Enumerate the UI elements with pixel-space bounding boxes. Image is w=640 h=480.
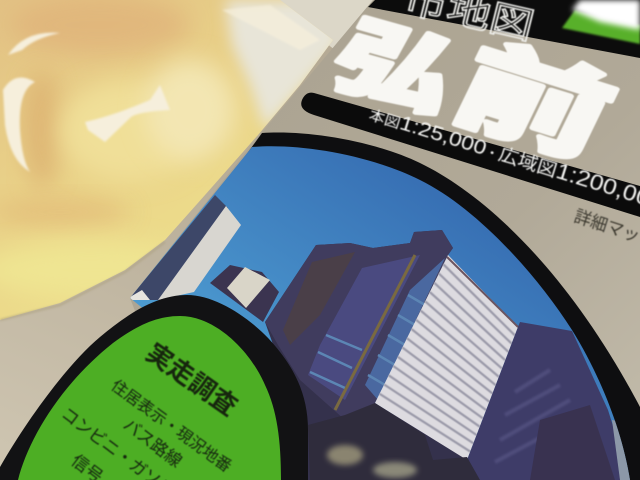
small left building [125, 195, 241, 300]
right building [465, 322, 634, 480]
plastic highlights [3, 5, 320, 172]
black badge ring [0, 295, 308, 480]
street level blocks [308, 403, 480, 480]
blue glass windows [308, 255, 420, 400]
badge heading: 実走調査 [141, 337, 243, 422]
upper left tower face [265, 230, 453, 420]
green badge [18, 316, 281, 480]
small middle building [210, 265, 279, 322]
title: 弘前 [314, 9, 640, 232]
sky [130, 146, 630, 480]
pale bread centre [54, 80, 172, 178]
clear plastic corner [225, 0, 340, 130]
badge line 1: 住居表示・現況地番 [108, 377, 235, 476]
black arc frame [140, 132, 640, 480]
bread in plastic bag [0, 0, 340, 325]
top black band [368, 0, 640, 58]
cover photo: city buildings [130, 146, 630, 480]
badge line 2: バス路線 [120, 415, 185, 471]
main tower dark faces [265, 230, 480, 480]
scale band [301, 93, 640, 217]
badge text [58, 337, 243, 480]
white facade [375, 255, 518, 460]
brown tower edge [283, 252, 355, 345]
title: 弘前: 弘 [314, 9, 476, 127]
gold column [335, 255, 415, 410]
warm upper shading [10, 0, 190, 55]
title: 弘前: 前 [436, 29, 630, 177]
green corner tab with glare [562, 0, 640, 44]
bag edge shadow [0, 242, 165, 320]
map book cover [130, 0, 640, 480]
